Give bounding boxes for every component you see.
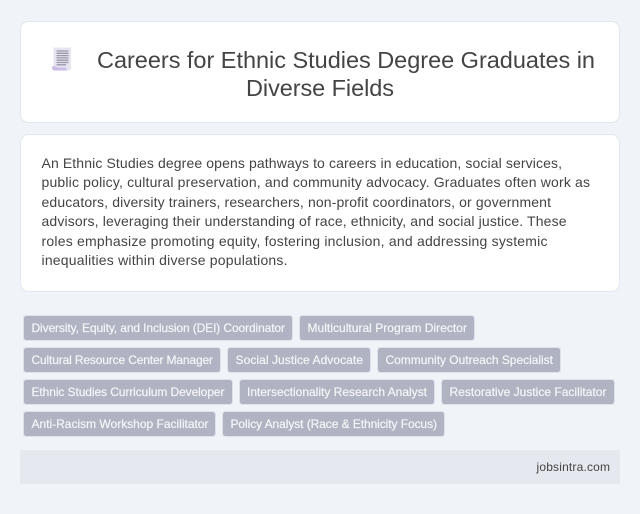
tag: Diversity, Equity, and Inclusion (DEI) Coordinator (32, 321, 285, 335)
text block: description paragraph: inequalities within diverse populations. (42, 252, 288, 268)
tag (228, 348, 370, 372)
heading: title: Diverse Fields (246, 75, 394, 101)
tag (24, 348, 220, 372)
panel: career tags (24, 316, 614, 436)
text block: description paragraph: An Ethnic Studies degree opens pathways to careers in education, social services, (42, 155, 562, 171)
tag (240, 380, 434, 404)
tag: Policy Analyst (Race & Ethnicity Focus) (230, 417, 437, 431)
tag: Ethnic Studies Curriculum Developer (32, 385, 224, 399)
tag: Anti-Racism Workshop Facilitator (32, 417, 208, 431)
panel: title card (20, 22, 620, 122)
text block: description paragraph: roles emphasize promoting equity, fostering inclusion, and addressing systemic (42, 233, 548, 249)
tag (24, 412, 216, 436)
tag: Multicultural Program Director (308, 321, 467, 335)
tag (300, 316, 474, 340)
tag (24, 316, 292, 340)
tag (442, 380, 614, 404)
heading: title: Careers for Ethnic Studies Degree Graduates in (97, 47, 595, 73)
text block: description paragraph (42, 155, 590, 268)
text block: description paragraph: public policy, cultural preservation, and community advocacy. Graduates often work as (42, 174, 590, 190)
tag (378, 348, 560, 372)
tag (222, 412, 444, 436)
panel: description (20, 134, 620, 292)
tag: Community Outreach Specialist (386, 353, 554, 367)
icon: document scroll (52, 48, 71, 70)
tag: Restorative Justice Facilitator (450, 385, 606, 399)
tag: Intersectionality Research Analyst (247, 385, 428, 399)
tag: Social Justice Advocate (236, 353, 363, 367)
tag: Cultural Resource Center Manager (32, 353, 213, 367)
heading: title (97, 47, 595, 101)
tag (24, 380, 232, 404)
text block: description paragraph: educators, diversity trainers, researchers, non-profit coordinators, or government (42, 194, 551, 210)
footer text: source: jobsintra.com (536, 460, 610, 474)
footer bar (20, 450, 620, 484)
text block: description paragraph: advisors, leveraging their understanding of race, ethnicity, and social justice. These (42, 213, 567, 229)
